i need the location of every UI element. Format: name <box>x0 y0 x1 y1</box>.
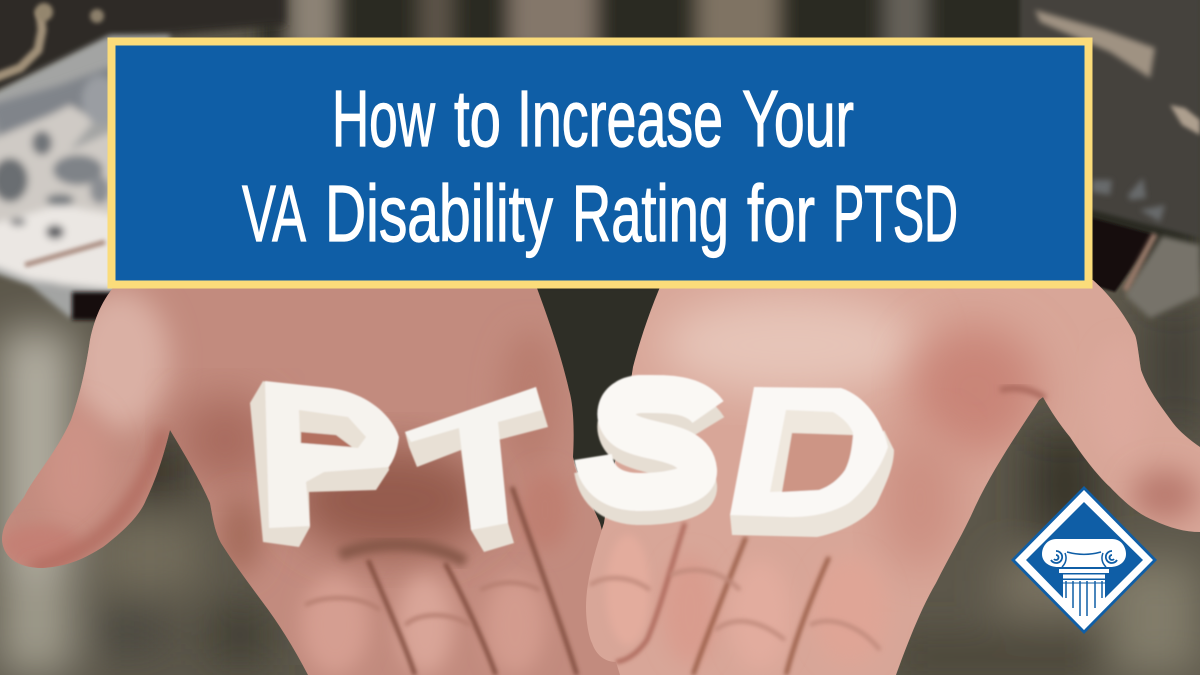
banner frame <box>112 42 1088 284</box>
right hand shading <box>590 295 1199 675</box>
title line 2: PTSD <box>833 169 958 258</box>
title line 2: Rating <box>572 169 729 258</box>
photo: right open hand <box>580 270 1200 675</box>
title line 2 <box>242 169 958 258</box>
title banner <box>112 42 1088 284</box>
title line 2: for <box>747 169 815 258</box>
background: blurred area lower right <box>890 300 1200 675</box>
title line 1: to <box>454 74 501 163</box>
title line 2: VA <box>242 169 306 258</box>
background: camouflage sleeve on the left <box>0 3 170 320</box>
title line 1: Your <box>742 74 854 163</box>
background: dark fabric top left <box>0 0 285 100</box>
title line 1 <box>332 74 854 163</box>
title line 1: Increase <box>517 74 723 163</box>
background: top strip blotches <box>260 0 1200 270</box>
photo: white PTSD block letters <box>250 381 894 552</box>
letter D <box>730 387 894 537</box>
letter T <box>405 387 548 552</box>
letter S <box>593 394 708 506</box>
photo: left open hand <box>0 270 650 675</box>
left hand shading <box>0 290 577 675</box>
title line 1: How <box>332 74 435 163</box>
icon: diamond logo with ionic column <box>1011 486 1157 634</box>
title line 2: Disability <box>325 169 553 258</box>
background: dark gap between the hands <box>520 250 670 570</box>
background: pale blurred area lower left <box>0 330 270 675</box>
background: dark collar flap on the right <box>1020 0 1200 318</box>
letter P <box>250 381 399 547</box>
